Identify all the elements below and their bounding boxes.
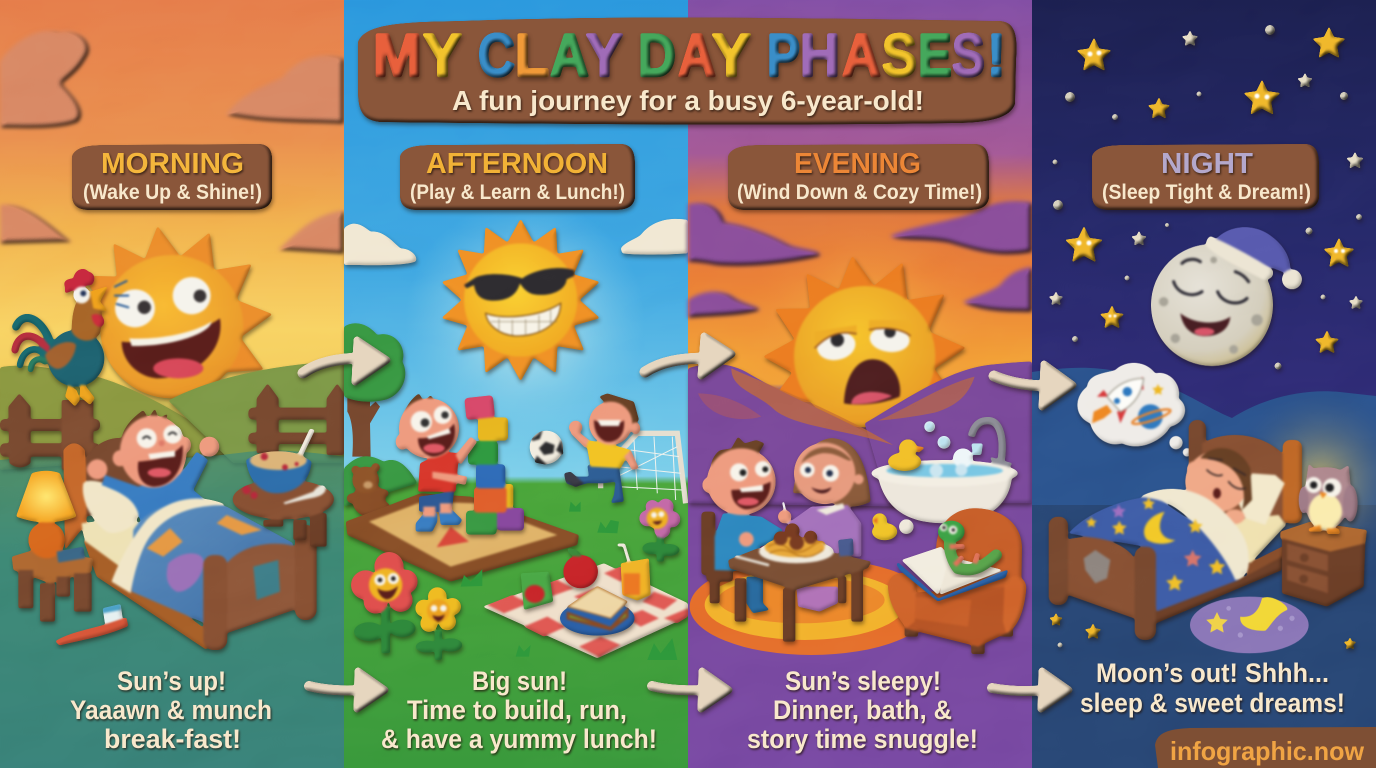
heading plaque: night — [1092, 144, 1319, 210]
dinner: mom — [778, 438, 871, 612]
heading plaque: morning: MORNING — [101, 148, 244, 180]
night hills — [1032, 368, 1376, 768]
caption: evening: Dinner, bath, & — [773, 695, 952, 725]
heading plaque: night: (Sleep Tight & Dream!) — [1102, 181, 1311, 204]
clouds — [344, 219, 688, 265]
grass tufts — [461, 502, 677, 660]
watermark badge: infographic.now — [1170, 736, 1365, 766]
icon: purple flower — [639, 499, 680, 562]
heading plaque: evening: (Wind Down & Cozy Time!) — [737, 181, 982, 204]
arrow: morning to afternoon — [303, 340, 387, 382]
title text: A — [550, 22, 589, 89]
panel: evening — [688, 0, 1032, 768]
icon: teddy bear — [347, 463, 390, 517]
title text: M — [373, 22, 422, 89]
caption: night — [1080, 658, 1345, 718]
dots — [1052, 25, 1362, 648]
star faces — [1076, 50, 1345, 318]
arrow: bottom evening — [992, 671, 1069, 709]
blanket — [132, 503, 293, 623]
title text: E — [918, 22, 952, 89]
footboard — [227, 544, 303, 633]
watermark badge — [1155, 727, 1376, 768]
icon: juice box — [521, 545, 651, 610]
arrow: afternoon to evening — [645, 336, 732, 376]
title text: Y — [586, 22, 623, 89]
caption: morning: Yaaawn & munch — [70, 695, 272, 725]
arrow: bottom afternoon — [652, 671, 729, 709]
picnic blanket — [482, 563, 688, 658]
arrow: bottom morning — [309, 671, 385, 709]
heading plaque: afternoon — [400, 144, 635, 210]
side table with cereal — [233, 428, 334, 547]
caption: night: Moon’s out! Shhh... — [1096, 658, 1329, 688]
block tower — [464, 395, 524, 535]
floor rug — [690, 558, 933, 655]
stars — [1048, 25, 1364, 650]
title text: L — [515, 22, 549, 89]
heading plaque: afternoon: (Play & Learn & Lunch!) — [410, 181, 625, 204]
icon: book — [897, 547, 1006, 600]
heading plaque: afternoon: AFTERNOON — [426, 148, 608, 180]
boy body — [102, 452, 213, 520]
icon: bookworm — [938, 521, 996, 570]
title text: A — [842, 22, 881, 89]
cream stars — [1048, 30, 1364, 309]
sandbox — [346, 493, 579, 582]
heading plaque: morning: (Wake Up & Shine!) — [83, 181, 262, 204]
caption: evening: story time snuggle! — [747, 724, 978, 754]
icon: sandwich on plate — [560, 587, 635, 636]
title text: S — [952, 22, 985, 89]
happy gold stars — [1049, 26, 1357, 650]
arrow: evening to night — [994, 364, 1073, 407]
hills — [0, 361, 344, 768]
panel: afternoon — [344, 0, 688, 768]
armchair — [888, 508, 1026, 654]
title text: D — [638, 22, 676, 89]
subtitle: A fun journey for a busy 6-year-old! — [452, 85, 924, 116]
boy with blocks — [396, 393, 477, 532]
dinner table with spaghetti — [728, 523, 871, 642]
dream bubble — [1077, 363, 1191, 457]
bed with sleeping boy — [1049, 420, 1302, 640]
bedside lamp table — [12, 471, 93, 622]
planet — [1138, 404, 1163, 429]
caption: evening: Sun’s sleepy! — [785, 666, 941, 696]
caption: morning — [70, 666, 272, 754]
icon: red flower — [351, 552, 418, 653]
caption: afternoon: & have a yummy lunch! — [381, 724, 657, 754]
panel: morning — [0, 0, 344, 768]
icon: bathtub — [871, 421, 1018, 534]
morning scene — [0, 223, 344, 768]
icon: soccer ball — [530, 431, 563, 464]
night footboard — [1059, 537, 1139, 620]
icon: yellow flower — [415, 587, 462, 660]
kicking boy — [564, 393, 640, 503]
caption: night: sleep & sweet dreams! — [1080, 688, 1345, 718]
title text: P — [767, 22, 800, 89]
title text: Y — [423, 22, 462, 89]
icon: rooster — [15, 269, 108, 407]
bed with boy — [63, 408, 317, 650]
caption: morning: Sun’s up! — [117, 666, 226, 696]
icon: sleeping moon with nightcap — [1151, 227, 1302, 366]
icon: rubber duck in bath — [888, 439, 925, 471]
panel: night — [1032, 0, 1376, 768]
caption: afternoon: Big sun! — [472, 666, 567, 696]
nightstand — [1280, 522, 1367, 607]
icon: cool sun — [438, 219, 603, 381]
fences — [0, 383, 344, 470]
heading plaque: morning — [72, 144, 272, 210]
afternoon scene — [344, 219, 688, 660]
dinner: boy — [701, 437, 783, 613]
title plaque — [358, 18, 1017, 125]
title text: H — [800, 22, 840, 89]
title text: ! — [987, 22, 1006, 89]
moon rug — [1190, 597, 1309, 653]
title text: A — [678, 22, 716, 89]
soccer goal — [601, 433, 686, 503]
tree and bushes — [344, 323, 417, 507]
icon: wake-up sun — [74, 223, 275, 398]
heading plaque: evening: EVENING — [794, 148, 921, 180]
night scene — [1049, 227, 1367, 653]
night blanket — [1069, 497, 1239, 612]
caption: morning: break-fast! — [104, 724, 241, 754]
title text: S — [882, 22, 917, 89]
icon: toothbrush — [58, 604, 126, 643]
caption: evening — [747, 666, 978, 754]
heading plaque: evening — [728, 144, 989, 210]
icon: sleepy sun — [763, 253, 968, 427]
title text: C — [478, 22, 515, 89]
evening scene — [688, 253, 1032, 655]
icon: glowing owl — [1299, 463, 1358, 534]
dusk hills — [688, 362, 1032, 507]
rocket — [1097, 377, 1144, 423]
caption: afternoon — [381, 666, 657, 754]
icon: rubber duck on floor — [872, 513, 897, 540]
title text: Y — [712, 22, 751, 89]
icon: apple — [563, 548, 598, 588]
morning clouds — [0, 31, 344, 254]
caption: afternoon: Time to build, run, — [407, 695, 627, 725]
heading plaque: night: NIGHT — [1161, 148, 1253, 180]
dusk clouds — [688, 201, 1032, 318]
